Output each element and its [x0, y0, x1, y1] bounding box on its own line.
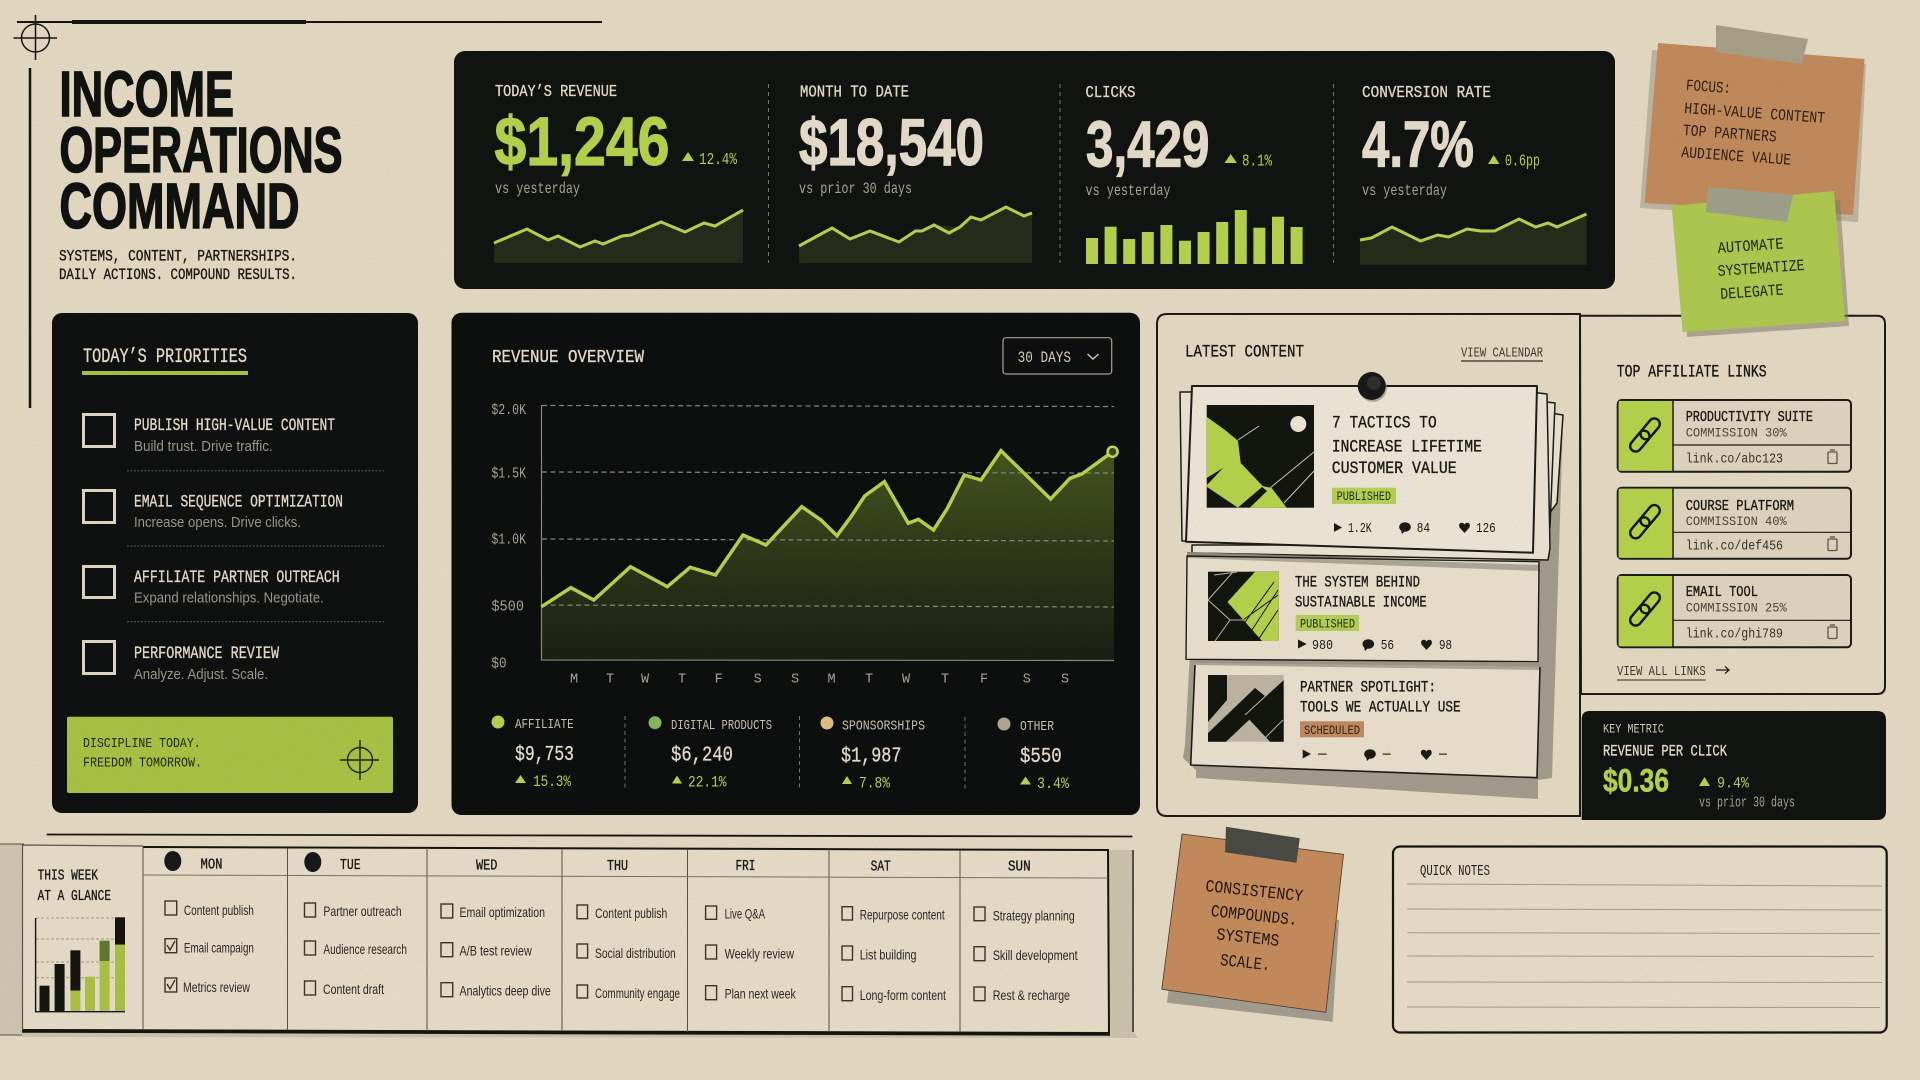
line chart: revenue: F: [715, 673, 723, 688]
stacked sheet behind table: [0, 844, 1138, 1038]
day: friday: [706, 859, 796, 1001]
affiliate card: course platform: link.co/def456: [1686, 538, 1783, 554]
stats row: [1334, 522, 1496, 537]
KPI: conversion rate: vs yesterday: [1362, 182, 1447, 200]
KPI: today's revenue: $1,246: [494, 103, 670, 180]
affiliate card: course platform: COMMISSION 40%: [1686, 514, 1787, 529]
line chart: revenue: T: [941, 673, 949, 688]
panel: week table: [0, 834, 1138, 1038]
legend: affiliate: $9,753: [515, 744, 574, 767]
panel: quick notes: QUICK NOTES: [1420, 864, 1490, 880]
day: sunday: [974, 860, 1078, 1003]
panel: key metric: 9.4%: [1717, 775, 1749, 793]
line chart: revenue: S: [754, 673, 762, 688]
KPI: clicks: [1086, 83, 1303, 264]
KPI: clicks: CLICKS: [1086, 83, 1136, 102]
line chart: revenue: $500: [491, 599, 524, 616]
stats row: [1303, 749, 1447, 761]
subtitle: SYSTEMS, CONTENT, PARTNERSHIPS.: [59, 248, 297, 266]
panel: latest content: LATEST CONTENT: [1185, 343, 1304, 363]
KPI: conversion rate: 4.7%: [1362, 108, 1474, 180]
dropdown: 30 days: 30 DAYS: [1018, 349, 1071, 367]
pin: [1358, 372, 1387, 402]
thumbnail: partner: [1208, 675, 1284, 742]
KPI: conversion rate: 0.6pp: [1505, 153, 1540, 172]
sticky note: consistency: SYSTEMS: [1215, 926, 1280, 952]
sticky note: automate: SYSTEMATIZE: [1717, 257, 1805, 281]
day: monday: [164, 851, 254, 995]
day: wednesday: A/B test review: [460, 942, 532, 958]
panel: top affiliate links: [1580, 316, 1885, 694]
sticky note: focus: FOCUS:: [1685, 77, 1731, 98]
affiliate card: email tool: COMMISSION 25%: [1686, 601, 1787, 616]
card: partner spotlight: [1191, 662, 1540, 778]
priority 2: Increase opens. Drive clicks.: [134, 515, 301, 531]
day: friday: Weekly review: [725, 945, 795, 961]
day: monday: Content publish: [184, 902, 254, 918]
panel: revenue overview: [452, 313, 1140, 815]
priority 1: PUBLISH HIGH-VALUE CONTENT: [134, 416, 335, 436]
sticky note: automate: [1672, 187, 1849, 337]
day: thursday: Content publish: [595, 905, 667, 921]
stats row: 98: [1439, 639, 1452, 654]
day: sunday: SUN: [1008, 860, 1031, 876]
panel: today's priorities: [52, 313, 418, 813]
title: OPERATIONS: [60, 114, 342, 186]
subtitle: DAILY ACTIONS. COMPOUND RESULTS.: [59, 266, 297, 284]
priority 3: [84, 566, 340, 607]
bar chart: clicks: [1086, 210, 1303, 264]
KPI: month to date: $18,540: [799, 105, 984, 179]
sticky note: consistency: [1162, 827, 1344, 1022]
line chart: revenue: T: [606, 673, 614, 688]
weekly mini chart: [36, 868, 125, 1012]
day: tuesday: Partner outreach: [323, 903, 402, 919]
panel: key metric: $0.36: [1603, 763, 1669, 799]
affiliate card: productivity suite: [1618, 400, 1851, 472]
affiliate card: email tool: [1618, 575, 1851, 647]
tape: [1225, 827, 1300, 863]
legend: sponsorships: SPONSORSHIPS: [842, 718, 925, 734]
day: saturday: List building: [860, 946, 916, 962]
dropdown: 30 days: [1003, 338, 1112, 374]
priority 1: [84, 414, 335, 455]
card: 7 tactics: CUSTOMER VALUE: [1332, 459, 1457, 479]
stats row: 980: [1312, 639, 1333, 654]
day: tuesday: Content draft: [323, 981, 384, 997]
weekly mini chart: AT A GLANCE: [38, 889, 111, 905]
day: wednesday: [441, 858, 551, 999]
panel: top affiliate links: TOP AFFILIATE LINKS: [1617, 363, 1767, 383]
day: friday: FRI: [736, 859, 755, 875]
priority 1: Build trust. Drive traffic.: [134, 439, 273, 455]
KPI: month to date: [799, 82, 1032, 263]
title: COMMAND: [60, 170, 300, 242]
day: monday: MON: [200, 857, 222, 873]
KPI: today's revenue: 12.4%: [699, 151, 738, 170]
priority 3: AFFILIATE PARTNER OUTREACH: [134, 568, 340, 588]
stacked sheets and shadow: [1180, 392, 1563, 799]
legend: affiliate: AFFILIATE: [515, 717, 574, 733]
day: tuesday: Audience research: [323, 941, 407, 957]
legend: digital products: $6,240: [671, 745, 733, 768]
sticky note: focus: TOP PARTNERS: [1682, 122, 1777, 147]
affiliate card: email tool: EMAIL TOOL: [1686, 585, 1758, 601]
heading: TODAY’S PRIORITIES: [83, 346, 247, 369]
card: 7 tactics: 7 TACTICS TO: [1332, 414, 1437, 434]
line chart: revenue: S: [1061, 673, 1069, 688]
title: [60, 58, 342, 242]
sticky note: consistency: CONSISTENCY: [1204, 878, 1304, 907]
panel: key metric: [1582, 711, 1886, 820]
line chart: revenue: $1.5K: [491, 466, 526, 483]
legend: affiliate: 15.3%: [533, 773, 571, 791]
day: sunday: Strategy planning: [993, 908, 1075, 924]
sticky note: automate: AUTOMATE: [1717, 235, 1784, 258]
day: monday: Email campaign: [184, 940, 254, 956]
day: thursday: Social distribution: [595, 945, 676, 961]
day: sunday: Skill development: [993, 947, 1078, 963]
affiliate card: course platform: COURSE PLATFORM: [1686, 499, 1794, 515]
affiliate card: email tool: link.co/ghi789: [1686, 627, 1783, 643]
line chart: revenue: F: [980, 673, 988, 688]
legend: other: 3.4%: [1037, 775, 1069, 793]
card: the system behind: [1186, 552, 1540, 662]
day: saturday: Repurpose content: [860, 906, 945, 922]
line chart: revenue: $2.0K: [491, 402, 526, 419]
day: thursday: [577, 859, 680, 1001]
callout: discipline today: DISCIPLINE TODAY.: [83, 737, 201, 752]
line chart: revenue: S: [791, 673, 799, 688]
tag: published: PUBLISHED: [1300, 618, 1355, 632]
panel: KPI strip: [454, 51, 1615, 289]
top rule and crosshair: [14, 15, 602, 60]
line chart: revenue: $0: [491, 656, 507, 673]
day: tuesday: TUE: [340, 858, 361, 874]
legend: sponsorships: $1,987: [841, 746, 901, 769]
affiliate card: productivity suite: PRODUCTIVITY SUITE: [1686, 410, 1813, 426]
panel: revenue overview: REVENUE OVERVIEW: [492, 347, 645, 368]
legend: digital products: [648, 716, 772, 792]
KPI: month to date: MONTH TO DATE: [800, 82, 909, 102]
tag: published: PUBLISHED: [1337, 490, 1391, 504]
weekly mini chart: THIS WEEK: [38, 868, 98, 884]
sticky note: automate: DELEGATE: [1720, 282, 1784, 304]
callout: discipline today: [67, 717, 393, 793]
KPI: today's revenue: [494, 82, 743, 263]
panel: quick notes: [1393, 846, 1887, 1032]
thumbnail: 7 tactics: [1207, 405, 1314, 508]
legend: sponsorships: 7.8%: [859, 774, 890, 792]
line chart: revenue: M: [828, 673, 836, 688]
day: sunday: Rest & recharge: [993, 987, 1070, 1003]
line chart: revenue: S: [1023, 673, 1031, 688]
line chart: revenue: T: [678, 673, 686, 688]
legend: affiliate: [492, 716, 574, 791]
heading: [82, 346, 248, 375]
sticky note: focus: AUDIENCE VALUE: [1681, 144, 1792, 170]
priority 4: [84, 642, 279, 683]
legend: other: [998, 718, 1069, 793]
subtitle: [59, 248, 297, 284]
panel: key metric: REVENUE PER CLICK: [1603, 743, 1728, 761]
affiliate card: course platform: [1618, 488, 1851, 559]
day: tuesday: [304, 852, 407, 997]
day: wednesday: Email optimization: [460, 904, 545, 920]
line chart: revenue: [491, 402, 1118, 688]
panel: key metric: KEY METRIC: [1603, 722, 1664, 737]
day: wednesday: WED: [476, 858, 497, 874]
line chart: revenue: $1.0K: [491, 532, 526, 549]
day: friday: Live Q&A: [725, 905, 765, 921]
priority 2: [84, 490, 343, 531]
card: partner spotlight: TOOLS WE ACTUALLY USE: [1300, 699, 1461, 717]
card: 7 tactics: INCREASE LIFETIME: [1332, 438, 1482, 458]
priority 4: PERFORMANCE REVIEW: [134, 644, 279, 664]
line chart: revenue: M: [570, 673, 578, 688]
card: partner spotlight: PARTNER SPOTLIGHT:: [1300, 679, 1436, 697]
affiliate card: productivity suite: COMMISSION 30%: [1686, 426, 1787, 441]
tape: [1706, 187, 1793, 222]
title: INCOME: [60, 58, 234, 130]
panel: latest content: [1157, 314, 1580, 816]
stats row: [1298, 639, 1452, 654]
affiliate card: productivity suite: link.co/abc123: [1686, 451, 1783, 467]
day: thursday: THU: [607, 859, 628, 875]
sticky note: focus: [1640, 25, 1866, 222]
legend: other: OTHER: [1020, 719, 1054, 735]
legend: digital products: 22.1%: [688, 774, 727, 792]
legend: other: $550: [1020, 746, 1062, 769]
priority 2: EMAIL SEQUENCE OPTIMIZATION: [134, 493, 343, 513]
KPI: conversion rate: CONVERSION RATE: [1362, 83, 1491, 102]
card: 7 tactics: [1186, 386, 1537, 553]
stats row: 126: [1476, 522, 1496, 537]
day: saturday: Long-form content: [860, 987, 946, 1003]
card: the system behind: THE SYSTEM BEHIND: [1295, 574, 1420, 592]
day: thursday: Community engage: [595, 985, 680, 1001]
left vertical rule: [29, 68, 31, 408]
priority 3: Expand relationships. Negotiate.: [134, 591, 324, 607]
panel: key metric: vs prior 30 days: [1699, 795, 1795, 812]
icon: crosshair: [340, 740, 379, 780]
KPI: conversion rate: [1360, 83, 1586, 265]
line chart: revenue: T: [865, 673, 873, 688]
stats row: 84: [1417, 522, 1430, 537]
KPI: today's revenue: vs yesterday: [495, 180, 580, 198]
KPI: month to date: vs prior 30 days: [799, 180, 912, 198]
KPI: clicks: 3,429: [1086, 108, 1210, 180]
legend: sponsorships: [820, 716, 925, 792]
priority 4: Analyze. Adjust. Scale.: [134, 667, 268, 683]
line chart: revenue: W: [902, 673, 911, 688]
day: wednesday: Analytics deep dive: [460, 983, 551, 999]
KPI: today's revenue: TODAY’S REVENUE: [495, 82, 617, 101]
stats row: 1.2K: [1348, 522, 1372, 537]
day: saturday: SAT: [871, 860, 891, 876]
callout: discipline today: FREEDOM TOMORROW.: [83, 757, 202, 772]
line chart: revenue: W: [641, 673, 650, 688]
tape: [1716, 25, 1808, 64]
link: view all links: VIEW ALL LINKS: [1617, 664, 1706, 680]
card: the system behind: SUSTAINABLE INCOME: [1295, 594, 1427, 612]
day: friday: Plan next week: [725, 985, 796, 1001]
KPI: clicks: vs yesterday: [1086, 182, 1171, 200]
day: monday: Metrics review: [183, 979, 251, 995]
legend: digital products: DIGITAL PRODUCTS: [671, 718, 772, 734]
sticky note: focus: HIGH-VALUE CONTENT: [1684, 100, 1826, 128]
sticky note: consistency: COMPOUNDS.: [1210, 903, 1298, 931]
link: view calendar: VIEW CALENDAR: [1461, 346, 1543, 362]
thumbnail: system: [1208, 572, 1279, 641]
day: saturday: [842, 860, 946, 1003]
sticky note: consistency: SCALE.: [1219, 952, 1271, 976]
stats row: 56: [1381, 639, 1394, 654]
KPI: clicks: 8.1%: [1242, 153, 1273, 172]
tag: scheduled: SCHEDULED: [1304, 724, 1360, 738]
